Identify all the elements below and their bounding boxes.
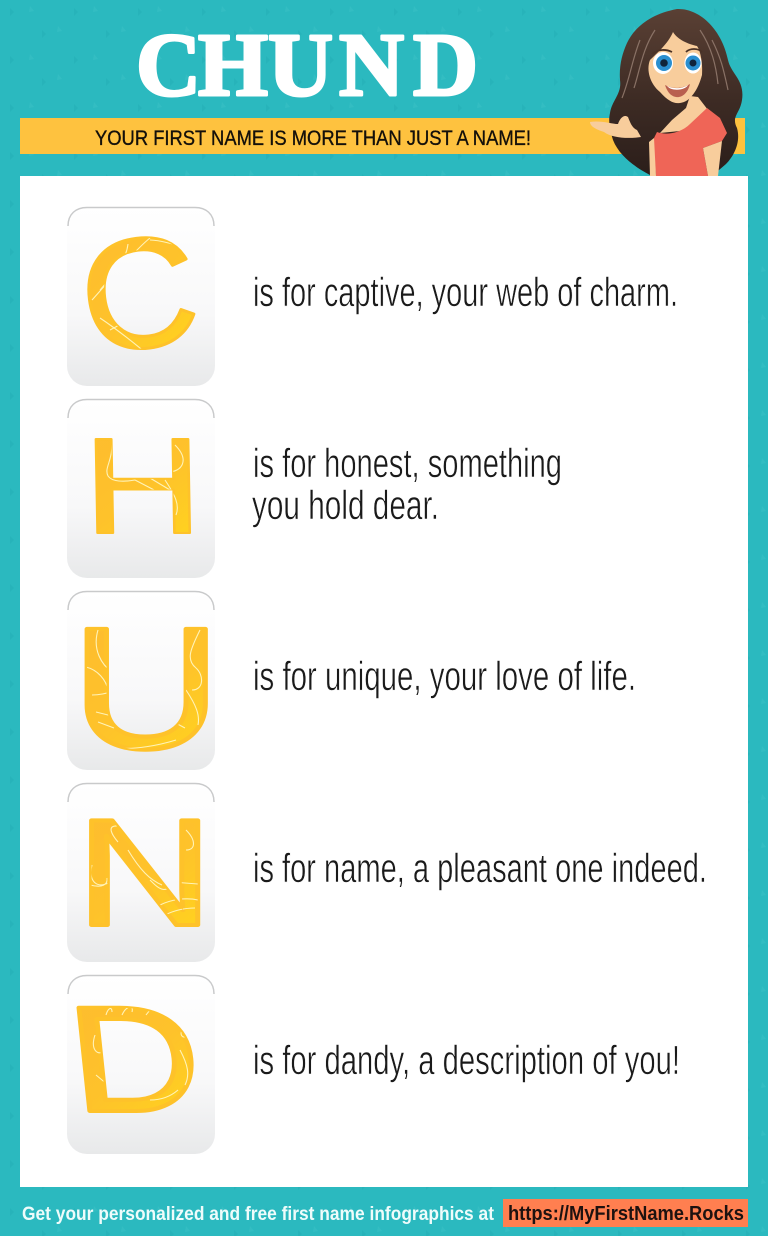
- text H: you hold dear.: [252, 482, 439, 528]
- text H: is for honest, something: [253, 440, 562, 486]
- smile: [665, 84, 690, 97]
- letter C: C: [71, 200, 207, 387]
- letter H: [94, 438, 192, 534]
- row: letter C: [67, 200, 678, 387]
- letter U: [84, 626, 208, 752]
- letter D: [76, 1006, 194, 1113]
- shirt: [653, 108, 727, 176]
- tile D: [67, 975, 215, 1154]
- website badge: https://MyFirstName.Rocks: [508, 1203, 744, 1225]
- letter N: [89, 818, 200, 927]
- letter U: U: [71, 592, 221, 785]
- row: letter U: [67, 591, 636, 785]
- white content panel: [20, 176, 748, 1187]
- letter N: N: [76, 788, 213, 958]
- footer: [22, 1199, 748, 1227]
- character illustration: [590, 9, 742, 176]
- tagline banner: YOUR FIRST NAME IS MORE THAN JUST A NAME!: [95, 127, 531, 150]
- tile U: [67, 591, 215, 770]
- row: letter D: [61, 975, 680, 1154]
- letter H: H: [82, 410, 204, 563]
- row: letter H: [67, 399, 562, 578]
- letter D: D: [61, 976, 208, 1144]
- text H: [252, 440, 562, 528]
- tile H: [67, 399, 215, 578]
- arm and hand: [590, 116, 656, 176]
- row: letter N: [67, 783, 707, 962]
- footer text: Get your personalized and free first name infographics at: [22, 1204, 495, 1225]
- title: CHUND: [136, 16, 478, 115]
- tagline banner: [20, 118, 745, 154]
- letter C: [87, 236, 196, 350]
- tile C: [67, 207, 215, 386]
- tile N: [67, 783, 215, 962]
- eyes: [652, 49, 702, 74]
